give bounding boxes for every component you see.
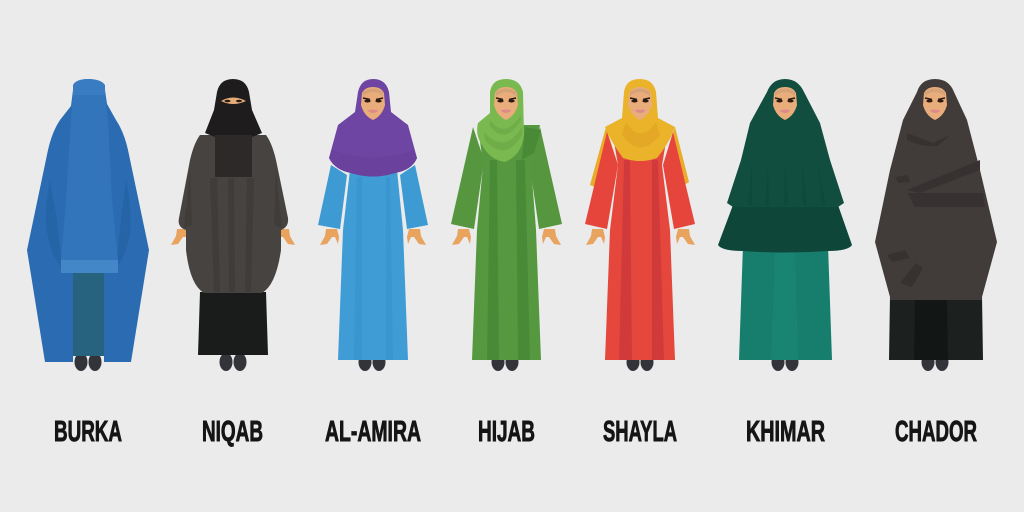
niqab eye slit: [221, 98, 246, 104]
figure: al-amira: [318, 79, 428, 371]
figure: niqab: [171, 79, 295, 371]
khimar lower cape tier: [718, 205, 852, 252]
niqab veil: [205, 79, 262, 177]
figure: khimar: [718, 79, 852, 371]
label: niqab: NIQAB: [202, 416, 263, 448]
al-amira dress folds: [354, 177, 393, 360]
chador cloak: [875, 79, 997, 300]
label: al-amira: AL-AMIRA: [325, 416, 421, 448]
shayla shoes: [626, 353, 654, 371]
khimar shoes: [772, 353, 798, 371]
figure: burka: [27, 79, 149, 371]
khimar upper cape tier: [727, 79, 844, 207]
hijab scarf: [477, 79, 524, 162]
hijab shoes: [492, 353, 518, 371]
burka hem band: [61, 260, 118, 273]
figure: hijab: [451, 79, 562, 371]
al-amira dress: [338, 170, 408, 360]
burka eye mesh: [73, 79, 105, 95]
hijab face: [494, 87, 518, 120]
niqab hands: [171, 229, 295, 245]
burka side folds: [46, 180, 131, 268]
shayla hands: [586, 229, 695, 245]
label: shayla: SHAYLA: [603, 416, 677, 448]
chador shoes: [922, 353, 948, 371]
al-amira hands: [320, 229, 426, 245]
shayla sleeves: [585, 132, 695, 229]
khimar pleats: [748, 165, 826, 205]
khimar face: [773, 87, 797, 120]
label: burka: BURKA: [54, 416, 122, 448]
niqab skirt: [198, 292, 268, 355]
hijab sleeves: [451, 127, 562, 229]
niqab folds: [184, 170, 282, 292]
shayla back scarf tails: [590, 127, 689, 188]
burka trousers and shoes: [73, 270, 104, 371]
chador face: [923, 87, 947, 120]
al-amira purple cape: [329, 79, 417, 176]
burka front panel: [61, 92, 118, 260]
al-amira face: [361, 87, 385, 120]
shayla dress: [605, 130, 675, 360]
al-amira shoes: [358, 353, 386, 371]
chador folds: [887, 133, 985, 287]
niqab shoes: [220, 353, 246, 371]
label: hijab: HIJAB: [478, 416, 535, 448]
niqab robe: [179, 135, 288, 293]
label: chador: CHADOR: [895, 416, 977, 448]
al-amira sleeves: [318, 165, 428, 229]
hijab hands: [452, 229, 561, 245]
chador skirt: [889, 295, 983, 360]
figure: shayla: [585, 79, 695, 371]
hijab robe: [472, 125, 541, 360]
khimar skirt: [739, 245, 832, 360]
burka outer cloak: [27, 79, 149, 362]
shayla scarf: [605, 79, 675, 161]
figure: chador: [875, 79, 997, 371]
label: khimar: KHIMAR: [746, 416, 825, 448]
hijab robe folds: [487, 127, 541, 360]
shayla face: [628, 87, 652, 120]
shayla dress folds: [619, 160, 664, 360]
